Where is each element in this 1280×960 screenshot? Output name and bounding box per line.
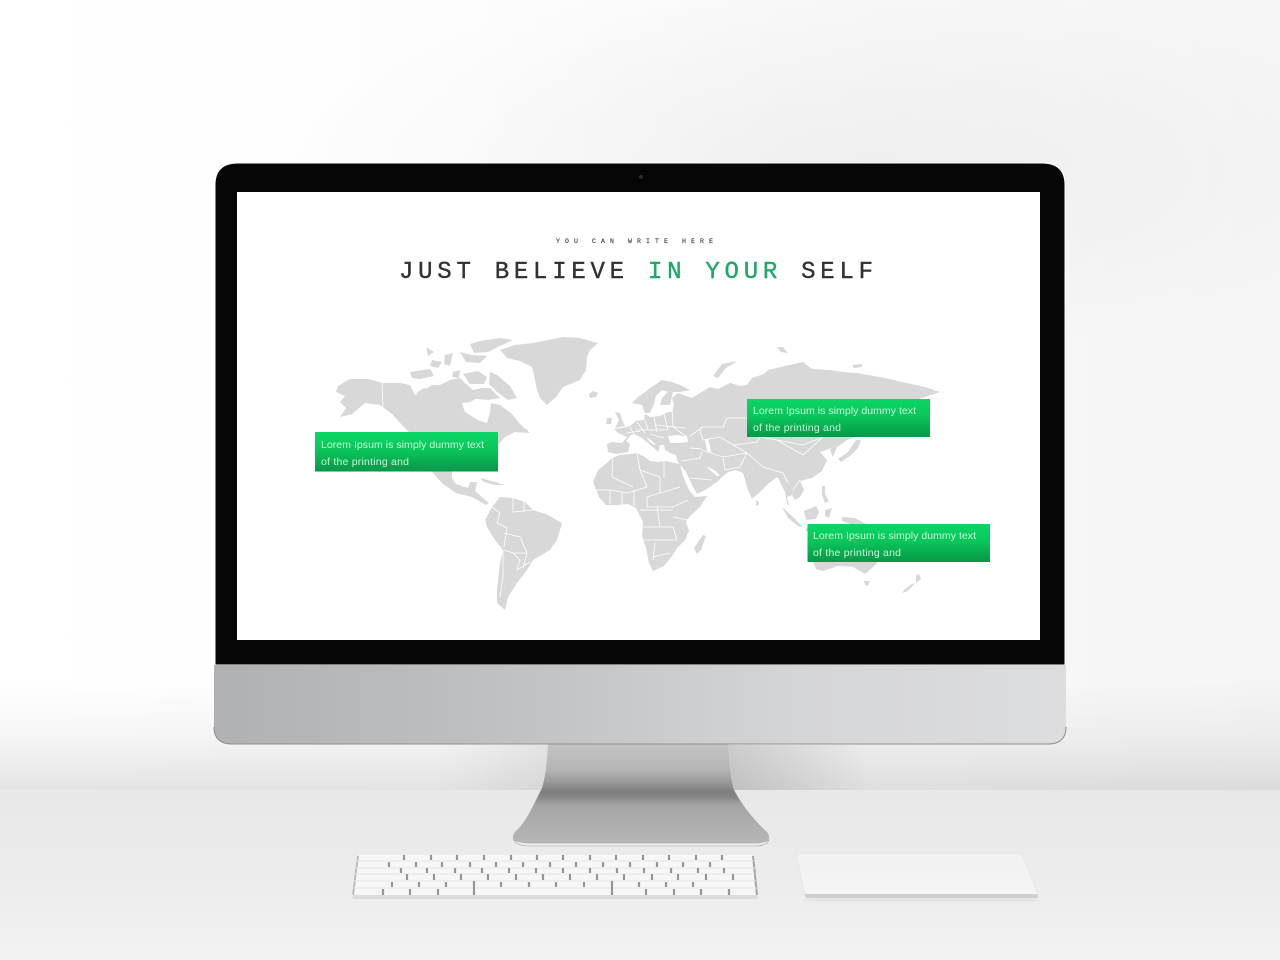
Africa <box>593 453 707 571</box>
callout: North America <box>315 432 498 472</box>
Scandinavia <box>632 380 690 413</box>
chin bottom edge <box>214 727 1066 744</box>
North and Central America <box>336 378 530 505</box>
monitor chin <box>214 665 1066 744</box>
Arctic islands <box>410 338 528 485</box>
callout: Russia: of the printing and <box>753 422 841 434</box>
country borders <box>382 383 823 597</box>
trackpad <box>797 853 1038 901</box>
background: desk <box>0 790 1280 960</box>
webcam <box>639 175 643 179</box>
Tasmania <box>864 581 870 586</box>
slide title: JUST BELIEVE IN YOUR SELF <box>399 259 873 286</box>
monitor <box>214 163 1066 846</box>
world map <box>336 337 940 610</box>
Eurasia <box>607 362 940 509</box>
background: soft wall glow <box>270 0 1280 370</box>
islands of Asia and Europe <box>606 347 862 554</box>
stand shadow on wall <box>440 745 870 790</box>
callout: Australia <box>808 524 990 562</box>
inland seas <box>647 435 720 476</box>
callout: Russia <box>747 399 930 437</box>
Australia <box>813 540 880 574</box>
New Guinea <box>842 517 866 524</box>
South America <box>485 497 562 610</box>
monitor stand <box>513 744 769 846</box>
callout: North America: of the printing and <box>321 456 409 468</box>
screen <box>237 192 1040 640</box>
New Zealand <box>902 574 921 593</box>
callout: Australia: of the printing and <box>813 547 901 559</box>
slide eyebrow text: YOU CAN WRITE HERE <box>556 238 718 245</box>
Greenland <box>500 337 598 405</box>
Iceland <box>589 391 598 398</box>
monitor bezel <box>215 163 1065 665</box>
keyboard <box>352 855 758 899</box>
callout: Russia: Lorem Ipsum is simply dummy text <box>753 405 916 417</box>
background: wall shading near desk <box>0 680 1280 790</box>
callout: North America: Lorem Ipsum is simply dummy text <box>321 439 484 451</box>
callout: Australia: Lorem Ipsum is simply dummy text <box>813 530 976 542</box>
